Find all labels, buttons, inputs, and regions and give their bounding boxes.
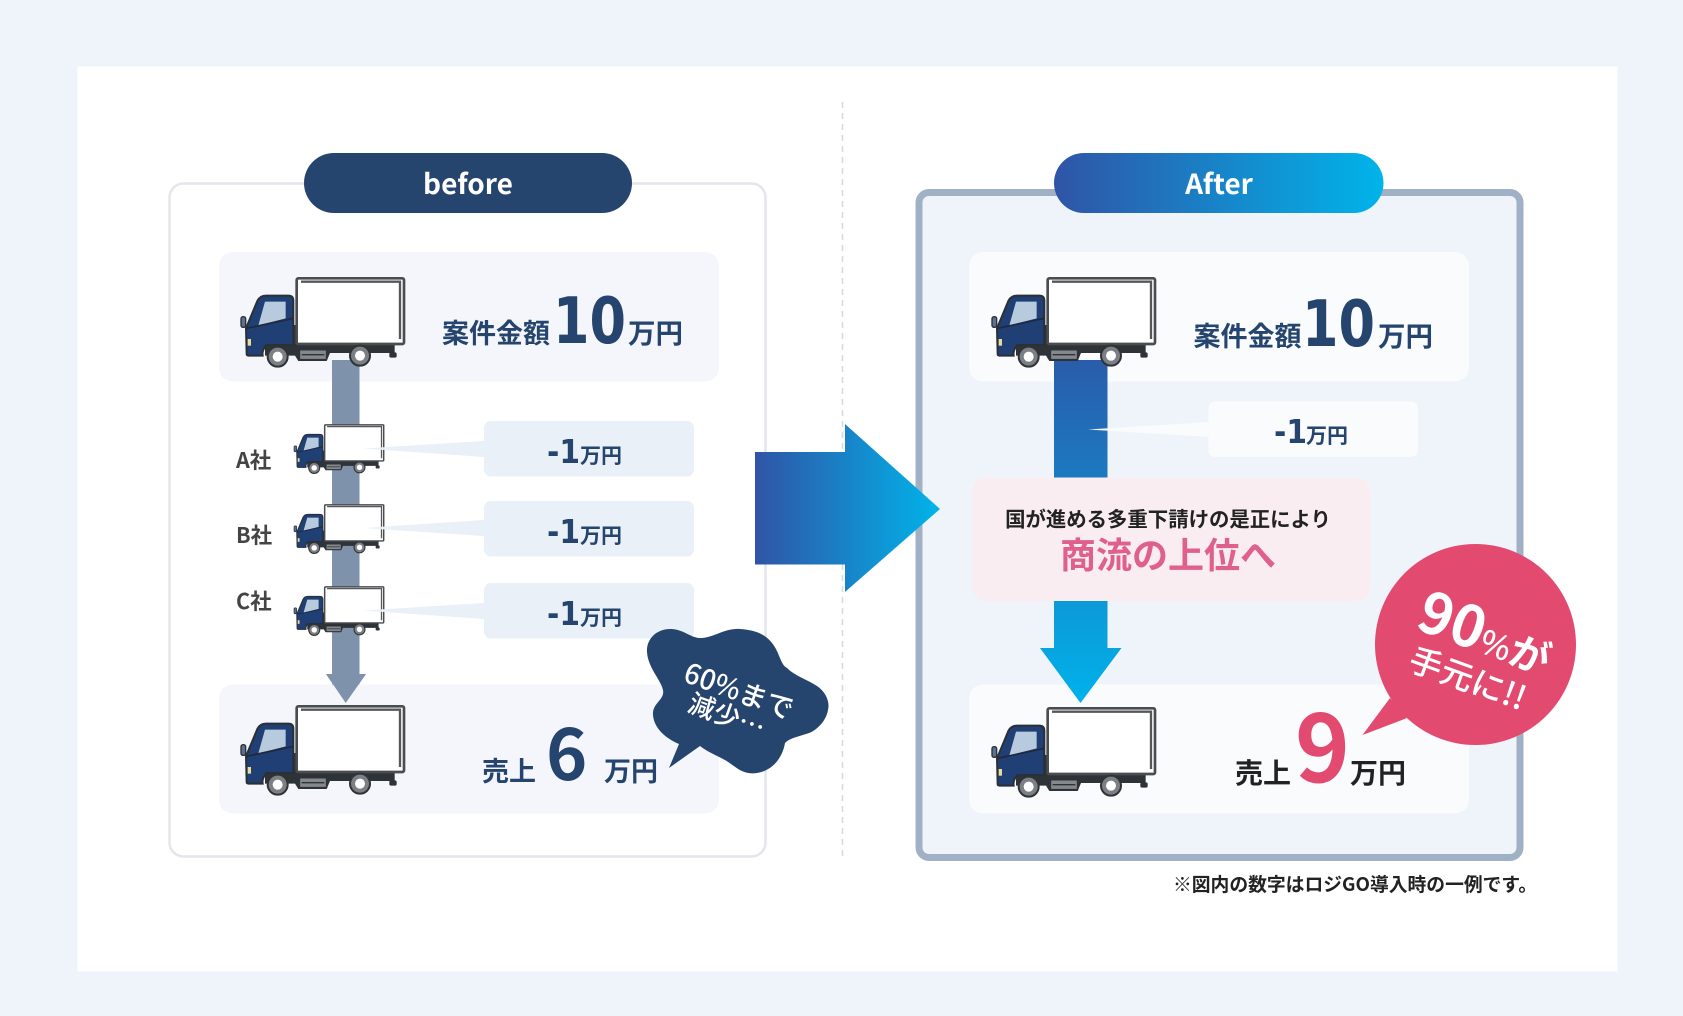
callout: 90% bubble: 手元に!!	[1403, 633, 1534, 720]
arrow: lower shaft and head	[1040, 601, 1122, 703]
arrow: upper shaft	[1054, 360, 1108, 478]
heading pill: before	[304, 153, 632, 213]
panel: after	[919, 153, 1576, 858]
row: company A: 万円	[580, 440, 622, 470]
footnote: ※図内の数字はロジGO導入時の一例です。	[1173, 870, 1537, 897]
arrow: before to after	[755, 424, 940, 592]
row: company B: -1	[547, 512, 580, 551]
row: company C: C社	[236, 585, 272, 616]
bottom row: sales: 売上	[482, 750, 536, 789]
callout: minus one: -1	[1274, 412, 1307, 451]
row: company C: 万円	[580, 602, 622, 632]
row: company C	[236, 583, 694, 638]
callout: 60% blob	[647, 629, 829, 773]
row: company A: -1	[547, 432, 580, 471]
row: company B: 万円	[580, 520, 622, 550]
bottom row: sales: 万円	[604, 750, 658, 789]
box: move up the supply chain	[972, 478, 1370, 601]
row: company B: B社	[236, 519, 273, 550]
box: move up the supply chain: 商流の上位へ	[1060, 527, 1276, 579]
callout: 90% bubble: 90%が	[1408, 567, 1566, 691]
top row: project amount: 案件金額	[1194, 315, 1302, 354]
callout: minus one	[1088, 402, 1418, 457]
arrow: flow down	[326, 360, 366, 703]
top row: project amount	[969, 252, 1469, 382]
bottom row: sales	[219, 674, 719, 814]
top row: project amount: 万円	[628, 311, 683, 351]
bottom row: sales: 万円	[1350, 752, 1406, 792]
bottom row: sales: 6	[546, 700, 587, 801]
heading pill: before: before	[423, 163, 513, 203]
box: move up the supply chain: 国が進める多重下請けの是正により	[1005, 502, 1331, 532]
callout: minus one: 万円	[1306, 420, 1348, 450]
callout: 90% bubble	[1362, 544, 1576, 745]
panel: before	[170, 153, 829, 856]
bottom row: sales: 9	[1295, 674, 1350, 809]
icon: top truck	[992, 278, 1155, 367]
top row: project amount: 案件金額	[442, 312, 550, 351]
row: company A	[235, 421, 694, 476]
top row: project amount: 10	[1302, 288, 1375, 362]
top row: project amount	[219, 252, 719, 382]
row: company B	[236, 501, 694, 556]
row: company C: -1	[547, 594, 580, 633]
top row: project amount: 10	[553, 285, 626, 359]
heading pill: after: After	[1184, 163, 1254, 203]
icon: top truck	[241, 278, 404, 367]
top row: project amount: 万円	[1378, 314, 1433, 354]
bottom row: sales: 売上	[1235, 752, 1291, 792]
callout: 60% blob: 減少…	[683, 682, 772, 746]
bottom row: sales	[969, 674, 1469, 814]
callout: 60% blob: 60%まで	[679, 652, 800, 728]
heading pill: after	[1054, 153, 1384, 213]
row: company A: A社	[235, 444, 272, 475]
